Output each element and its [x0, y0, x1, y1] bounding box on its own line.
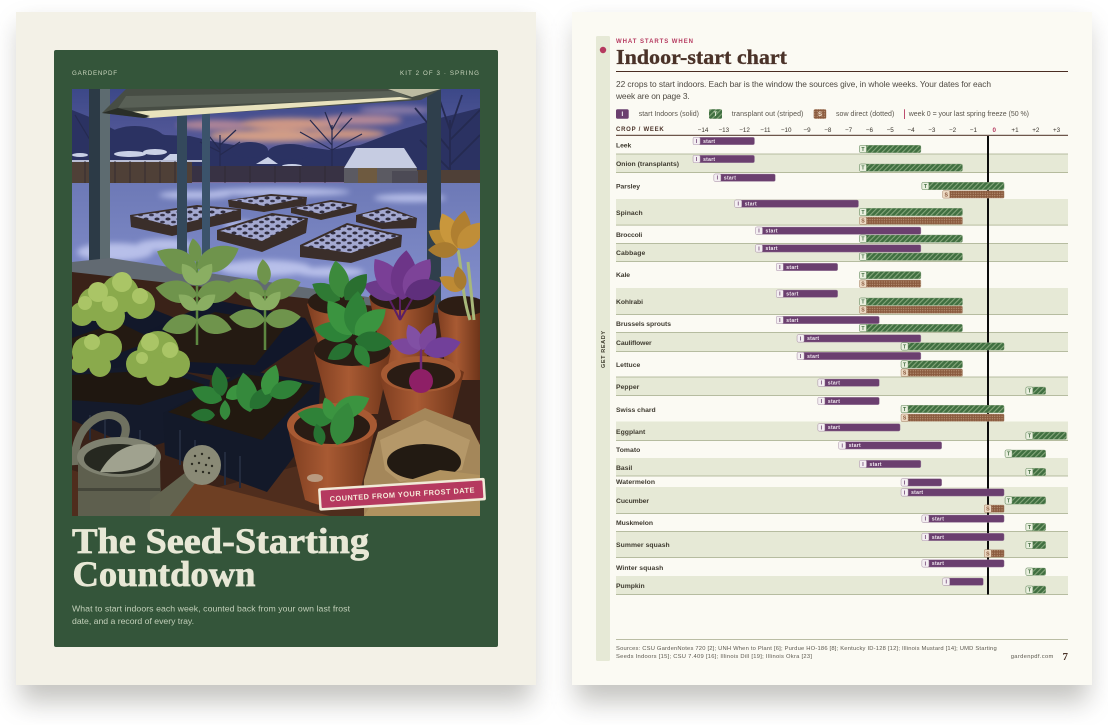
row: Pepper: I — [821, 381, 823, 387]
front terracotta pot with basil — [287, 389, 377, 506]
axis header: +1 — [1011, 127, 1019, 134]
legend: S — [818, 112, 822, 118]
row: Eggplant: T — [1028, 434, 1032, 440]
site name: gardenpdf.com — [1011, 654, 1054, 660]
legend: I — [621, 112, 623, 118]
paper bag of soil — [364, 408, 480, 516]
row: Leek: Leek — [616, 142, 632, 149]
axis header: −3 — [928, 127, 936, 134]
row: Kohlrabi: T — [861, 300, 865, 306]
row: Kohlrabi — [616, 290, 962, 314]
row: Winter squash: Winter squash — [616, 565, 663, 572]
row: Leek: T — [861, 147, 865, 153]
row: Swiss chard: start — [828, 399, 840, 405]
cover subtitle — [72, 604, 351, 626]
axis header: −5 — [887, 127, 894, 134]
axis header: −11 — [760, 127, 771, 134]
row: Basil: T — [1028, 470, 1032, 476]
cover subtitle: date, and a record of every tray. — [72, 616, 194, 626]
row: Lettuce: I — [800, 354, 802, 360]
garden beds — [130, 194, 417, 263]
row: Muskmelon — [616, 515, 1046, 531]
row: Summer squash: start — [932, 535, 944, 541]
row: Leek: I — [696, 139, 698, 145]
kicker: WHAT STARTS WHEN — [616, 39, 693, 45]
row: Cabbage: I — [758, 246, 760, 252]
row: Kale: start — [786, 265, 799, 271]
row: Onion: Onion (transplants) — [616, 161, 679, 168]
row: Watermelon — [616, 479, 942, 486]
row: Swiss chard — [616, 397, 1004, 422]
row: Spinach: S — [861, 219, 865, 225]
row: Brussels sprouts: T — [861, 326, 865, 332]
sources footnote: Seeds Indoors [15]; CSU 7.409 [16]; Illinois Dill [19]; Illinois Okra [23] — [616, 654, 812, 660]
axis header: −10 — [781, 127, 792, 134]
row: Pumpkin — [616, 578, 1046, 594]
axis header: −1 — [970, 127, 977, 134]
row: Watermelon: Watermelon — [616, 479, 655, 486]
row: Summer squash: S — [986, 551, 990, 557]
row: Cucumber — [616, 489, 1046, 513]
illustration: seedlings indoors before a snowy garden — [70, 89, 490, 516]
row: Basil — [616, 460, 1046, 476]
row: Cucumber: Cucumber — [616, 498, 649, 505]
row: Parsley: T — [924, 184, 928, 190]
basil in tray — [189, 362, 305, 421]
axis header: −12 — [739, 127, 750, 134]
row: Spinach — [616, 200, 962, 225]
row: Cucumber: T — [1007, 498, 1011, 504]
row: Muskmelon: start — [932, 516, 944, 522]
row: Broccoli: Broccoli — [616, 232, 642, 239]
row: Swiss chard: I — [821, 399, 823, 405]
seed trays — [72, 300, 320, 492]
row: Cabbage: start — [766, 246, 778, 252]
row: Summer squash: I — [925, 535, 927, 541]
row: Spinach: Spinach — [616, 210, 643, 217]
row: Pepper: Pepper — [616, 384, 640, 391]
row: Winter squash: T — [1028, 570, 1032, 576]
row: Kohlrabi: S — [861, 308, 865, 314]
row: Lettuce: start — [807, 354, 819, 360]
row: Onion: T — [861, 166, 865, 172]
panel: green cover card — [54, 50, 498, 647]
page number: 7 — [1062, 651, 1068, 663]
legend: start Indoors (solid) — [639, 111, 699, 118]
purple beet with root — [389, 319, 463, 393]
legend: week 0 = your last spring freeze (50 %) — [908, 111, 1029, 118]
row: Onion — [616, 155, 962, 172]
sticker: counted from your frost date — [318, 478, 486, 511]
bench — [72, 440, 480, 516]
tomato seedlings — [152, 237, 304, 350]
row: Tomato — [616, 442, 1046, 458]
row: Summer squash — [616, 533, 1046, 557]
row: Spinach: start — [745, 202, 757, 208]
row: Watermelon: I — [904, 480, 906, 486]
axis header: −4 — [907, 127, 915, 134]
legend: T — [714, 112, 718, 118]
axis header: −9 — [803, 127, 811, 134]
row: Cabbage: T — [861, 255, 865, 261]
lettuce seedlings — [70, 272, 190, 386]
sources footnote — [616, 646, 997, 660]
row: Eggplant: I — [821, 425, 823, 431]
row: Onion: I — [696, 157, 698, 163]
upper basil — [312, 260, 392, 368]
axis header: −2 — [949, 127, 957, 134]
cover title: The Seed-Starting — [72, 521, 369, 561]
row: Brussels sprouts: start — [786, 318, 799, 324]
row: Muskmelon: Muskmelon — [616, 520, 653, 527]
watering can — [75, 415, 221, 516]
row: Cabbage — [616, 245, 962, 261]
row: Kale — [616, 263, 921, 288]
row: Winter squash: I — [925, 561, 927, 567]
row: Lettuce: Lettuce — [616, 362, 641, 369]
row: Basil: Basil — [616, 465, 632, 472]
row: Spinach: T — [861, 210, 865, 216]
row: Broccoli: I — [758, 229, 760, 235]
axis header: −7 — [845, 127, 853, 134]
row: Cucumber: S — [986, 507, 990, 513]
chart: indoor-start weeks — [616, 127, 1068, 595]
axis header — [616, 127, 1068, 136]
row: Tomato: T — [1007, 452, 1011, 458]
row: Kohlrabi: Kohlrabi — [616, 299, 643, 306]
row: Cabbage: Cabbage — [616, 250, 646, 257]
sidebar tab — [596, 36, 610, 661]
row: Kohlrabi: I — [779, 292, 781, 298]
row: Cauliflower: Cauliflower — [616, 340, 652, 347]
row: Tomato: I — [841, 443, 843, 449]
row: Kohlrabi: start — [786, 292, 799, 298]
row: Cucumber: I — [904, 490, 906, 496]
axis header: CROP / WEEK — [616, 127, 664, 133]
axis header: −13 — [718, 127, 730, 134]
row: Broccoli — [616, 227, 962, 243]
sidebar tab: GET READY — [601, 331, 607, 368]
row: Broccoli: start — [766, 228, 778, 234]
axis header: 0 — [992, 127, 996, 134]
row: Pepper: T — [1028, 389, 1032, 395]
sticker: counted from your frost date: COUNTED FROM YOUR FROST DATE — [329, 485, 475, 504]
row: Winter squash: start — [932, 561, 944, 567]
row: Onion: start — [703, 157, 715, 163]
axis header: +3 — [1053, 127, 1061, 134]
axis header: −14 — [698, 127, 709, 134]
row: Eggplant — [616, 424, 1066, 440]
back pots — [307, 284, 486, 420]
row: Lettuce — [616, 352, 962, 377]
row: Leek: start — [703, 139, 715, 145]
legend: sow direct (dotted) — [836, 111, 894, 118]
week 0 frost line — [987, 136, 989, 594]
axis header: −6 — [866, 127, 873, 134]
row: Eggplant: Eggplant — [616, 429, 646, 436]
row: Kale: I — [779, 265, 781, 271]
cover title — [72, 521, 369, 594]
row: Parsley: S — [944, 192, 948, 198]
snowy ground — [72, 183, 480, 302]
row: Parsley: start — [724, 176, 736, 182]
row: Cauliflower: I — [800, 336, 802, 342]
panel: cover page — [16, 12, 536, 685]
row: Spinach: I — [737, 202, 739, 208]
grow light — [102, 89, 441, 118]
row: Brussels sprouts: I — [779, 318, 781, 324]
panel: chart page — [572, 12, 1092, 685]
fence — [72, 162, 192, 183]
orange leaf plant — [428, 210, 480, 320]
intro text: 22 crops to start indoors. Each bar is the window the sources give, in whole weeks. Your dates for each — [616, 79, 991, 89]
row: Parsley: I — [717, 176, 719, 182]
row: Cauliflower — [616, 335, 1004, 350]
purple chard — [361, 249, 444, 320]
axis header: +2 — [1032, 127, 1040, 134]
row: Kale: T — [861, 273, 865, 279]
row: Basil: I — [862, 462, 864, 468]
page heading: Indoor-start chart — [616, 45, 787, 69]
shed — [344, 168, 417, 183]
kit label: KIT 2 OF 3 · SPRING — [400, 70, 479, 77]
legend: transplant out (striped) — [732, 111, 803, 118]
row: Summer squash: Summer squash — [616, 542, 670, 549]
row: Muskmelon: T — [1028, 525, 1032, 531]
sources footnote: Sources: CSU GardenNotes 720 [2]; UNH When to Plant [6]; Purdue HO-186 [8]; Kentucky ID-128 [12]; Illinois Mustard [14]; UMD Starting — [616, 646, 997, 652]
row: Brussels sprouts — [616, 316, 962, 332]
row: Eggplant: start — [828, 425, 840, 431]
row: Pumpkin: T — [1028, 588, 1032, 594]
row: Basil: start — [870, 462, 882, 468]
row: Pepper — [616, 379, 1046, 395]
row: Muskmelon: I — [925, 517, 927, 523]
row: Kale: S — [861, 282, 865, 288]
row: Pumpkin: I — [945, 580, 947, 586]
row: Summer squash: T — [1028, 543, 1032, 549]
row: Winter squash — [616, 560, 1046, 576]
row: Kale: Kale — [616, 272, 630, 279]
row: Parsley — [616, 174, 1004, 198]
row: Swiss chard: S — [903, 416, 907, 422]
cover title: Countdown — [72, 554, 256, 594]
brand label: GARDENPDF — [72, 70, 117, 77]
window frame — [72, 89, 480, 516]
intro text — [615, 79, 991, 101]
row: Cauliflower: start — [807, 336, 819, 342]
row: Pumpkin: Pumpkin — [616, 583, 645, 590]
row: Cauliflower: T — [903, 344, 907, 350]
row: Broccoli: T — [861, 237, 865, 243]
row: Tomato: Tomato — [616, 447, 640, 454]
row: Swiss chard: T — [903, 407, 907, 413]
row: Parsley: Parsley — [616, 183, 640, 190]
row: Swiss chard: Swiss chard — [616, 407, 656, 414]
row: Tomato: start — [849, 443, 861, 449]
distant tree line — [72, 108, 480, 175]
row: Leek — [616, 137, 921, 153]
snow on far roofs and trees — [72, 149, 302, 166]
row: Brussels sprouts: Brussels sprouts — [616, 321, 671, 328]
row: Lettuce: S — [903, 371, 907, 377]
cover subtitle: What to start indoors each week, counted back from your own last frost — [72, 604, 351, 614]
legend — [616, 109, 1029, 119]
axis header: −8 — [824, 127, 832, 134]
row: Lettuce: T — [903, 362, 907, 368]
row: Cucumber: start — [911, 490, 923, 496]
row: Pepper: start — [828, 380, 840, 386]
intro text: week are on page 3. — [615, 91, 690, 101]
